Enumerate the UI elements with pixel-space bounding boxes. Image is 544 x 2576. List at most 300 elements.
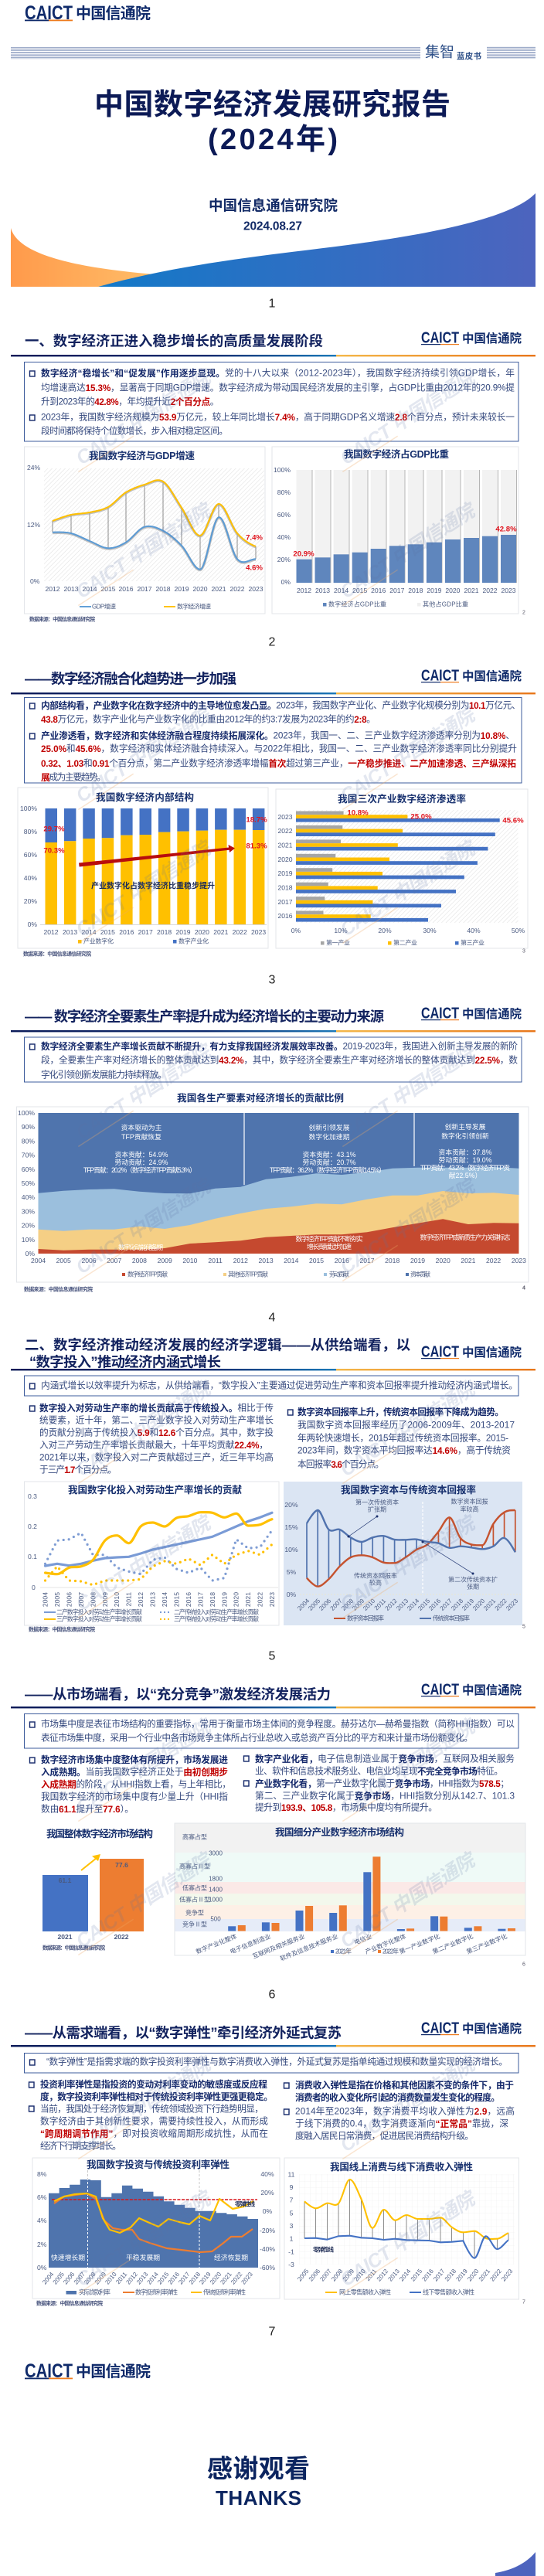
logo: CAICT cover	[25, 2, 151, 24]
panel: factor contribution stacked area chart: 2018	[385, 1257, 400, 1264]
panel: sub-industry market structure: 3000	[209, 1850, 223, 1856]
panel: investment rate elasticity chart: 2015	[156, 2271, 171, 2286]
callout box: market concentration: 表征市场集中度，采用一个行业中各市场竞争主体所占行业总收入或总资产百分比的平方和来计量市场份额变化。	[41, 1733, 473, 1744]
logo: CAICT	[421, 1005, 459, 1022]
panel: investment rate elasticity chart: 2005	[52, 2271, 66, 2286]
panel: investment rate elasticity chart: 2008	[83, 2271, 97, 2286]
slide number small: 5	[522, 1625, 525, 1629]
slide number small: 3	[522, 949, 525, 954]
chart title: 我国各生产要素对经济增长的贡献比例	[177, 1092, 344, 1104]
panel: investment rate elasticity chart: 40%	[260, 2170, 274, 2178]
panel: sub-industry market structure: 第一产业数字化	[398, 1932, 441, 1955]
panel: investment rate elasticity chart: 2022	[230, 2271, 244, 2286]
text block: investment elasticity: 当前，我国处于经济恢复期，传统领域投资下行趋势明显，	[40, 2104, 264, 2115]
panel: factor contribution stacked area chart: 创新引领发展	[309, 1123, 350, 1131]
chart: overall market structure: 2022	[114, 1933, 129, 1941]
callout box: market concentration	[25, 1714, 518, 1748]
text: CAICT 中国信通院	[336, 1714, 481, 1819]
panel: share of GDP bar chart: 2021	[464, 587, 479, 594]
panel: income elasticity chart: 2023	[500, 2268, 515, 2283]
text: CAICT 中国信通院	[336, 365, 481, 469]
text: CAICT 中国信通院	[72, 1376, 217, 1481]
callout box: TFP: 数字经济全要素生产率增长贡献不断提升，有力支撑我国经济发展效率改善。2019-2023年，我国进入创新主导发展的新阶	[41, 1040, 518, 1051]
panel: factor contribution stacked area chart: TFP贡献：20.2%（数字经济TFP贡献5.3%）	[83, 1165, 196, 1174]
text block: investment elasticity: 度，数字投资利率弹性相对于传统投资利率弹性更强更稳定。	[40, 2091, 273, 2102]
panel: investment rate elasticity chart: 2016	[167, 2271, 181, 2286]
slide number small: 4	[522, 1286, 525, 1291]
text block: capital returns	[287, 1407, 515, 1470]
panel: share of GDP bar chart: 100%	[274, 466, 291, 474]
panel: penetration rate horizontal bars: 2018	[277, 884, 293, 892]
callout box: integration trend: 43.8万亿元，数字产业化与产业数字化的比重由2012年的约3:7发展为2023年的约2:8。	[41, 714, 376, 725]
panel: factor contribution stacked area chart: TFP贡献：36.2%（数字经济TFP贡献14.5%）	[270, 1165, 386, 1174]
panel: internal structure stacked bars	[18, 788, 268, 948]
panel: capital return chart: 20%	[284, 1501, 298, 1509]
callout box: digital elasticity	[25, 2053, 518, 2073]
section 5 heading: “数字投入”推动经济内涵式增长	[29, 1354, 221, 1370]
data source: 数据来源：中国信息通信研究院	[24, 1286, 93, 1292]
panel: factor contribution stacked area chart: 2016	[335, 1257, 349, 1264]
text block: investment elasticity: 数字经济由于其创新性要求，需要持续性投入，从而形成	[40, 2116, 268, 2127]
stripe band with blue book mark: 蓝皮书	[457, 51, 482, 61]
title: (2024年)	[208, 124, 338, 156]
panel: capital return chart: 2010	[362, 1597, 377, 1612]
panel: factor contribution stacked area chart: 资本贡献	[410, 1271, 430, 1278]
panel: investment rate elasticity chart: 20%	[260, 2189, 274, 2197]
text block: income elasticity: 消费收入弹性是指在价格和其他因素不变的条件下，由于	[295, 2079, 514, 2090]
logo	[421, 329, 522, 346]
panel: GDP growth line chart: 2021	[211, 585, 226, 593]
panel: penetration rate horizontal bars: 我国三次产业数字经济渗透率	[338, 793, 466, 805]
text block: market maturity	[29, 1754, 231, 1815]
text: CAICT 中国信通院	[72, 836, 217, 941]
panel: income elasticity chart: 我国线上消费与线下消费收入弹性	[330, 2161, 473, 2173]
publisher and date: 中国信息通信研究院	[209, 198, 338, 213]
header rule	[11, 1369, 536, 1370]
panel: internal structure stacked bars: 产业数字化占数字经济比重稳步提升	[91, 881, 215, 890]
panel: GDP growth line chart: 2020	[192, 585, 208, 593]
panel: digital input contribution to labor productivity: 二产数字投入对劳动生产率增长贡献	[56, 1608, 142, 1615]
text block: investment elasticity: 经济下行期支撑增长。	[40, 2141, 121, 2152]
panel: GDP growth line chart: 24%	[27, 464, 41, 471]
panel: share of GDP bar chart: 0%	[281, 578, 291, 586]
panel: GDP growth line chart: 2023	[248, 585, 264, 593]
panel: capital return chart: 第一次传统资本	[355, 1498, 399, 1506]
text: CAICT 中国信通院	[72, 2186, 217, 2291]
text block: income elasticity: 消费者的收入变化所引起的消费数量发生变化的程度。	[295, 2091, 500, 2102]
panel: share of GDP bar chart: 2016	[371, 587, 386, 594]
panel: capital return chart: 传统资本回报率	[354, 1572, 397, 1580]
callout box: digital economy role: 均增速高达15.3%，显著高于同期GDP增速。数字经济成为带动国民经济发展的主引擎，占GDP比重由2012年的20.9%提	[41, 382, 515, 393]
panel: investment rate elasticity chart: 2%	[37, 2241, 47, 2248]
panel: penetration rate horizontal bars: 2022	[277, 827, 293, 835]
panel: GDP growth line chart: 12%	[27, 521, 41, 529]
stripe band with blue book mark: 集智	[425, 43, 454, 60]
panel: capital return chart: 0%	[287, 1591, 297, 1598]
panel: share of GDP bar chart: 2017	[389, 587, 405, 594]
panel: digital input contribution to labor productivity: 三产数字投入对劳动生产率增长贡献	[56, 1615, 142, 1623]
panel: penetration rate horizontal bars: 0%	[291, 927, 301, 934]
panel: factor contribution stacked area chart: 资本贡献：54.9%	[115, 1150, 168, 1159]
panel: income elasticity chart: 5	[290, 2209, 294, 2217]
panel: sub-industry market structure: 低寡占Ⅱ型	[179, 1895, 210, 1903]
text block: market maturity: 入成熟期的阶段，从HHI指数上看，与上年相比，	[41, 1779, 231, 1790]
data source: 数据来源：中国信息通信研究院	[23, 951, 91, 957]
callout box: TFP: 字化引领创新发展能力持续释放。	[41, 1070, 167, 1080]
panel: income elasticity chart: 7	[290, 2197, 294, 2204]
panel: factor contribution stacked area chart: 100%	[18, 1109, 35, 1117]
panel: GDP growth line chart: 2015	[100, 585, 116, 593]
panel: factor contribution stacked area chart: 50%	[22, 1179, 35, 1187]
logo	[421, 1343, 522, 1360]
logo: 中国信通院	[462, 669, 522, 683]
header rule	[11, 1030, 536, 1032]
panel: sub-industry market structure: 产业数字化整体	[364, 1932, 407, 1955]
panel: factor contribution stacked area chart: 70%	[22, 1152, 35, 1159]
panel: GDP growth line chart: 2012	[45, 585, 60, 593]
data source: 数据来源：中国信息通信研究院	[42, 1945, 105, 1951]
panel: factor contribution stacked area chart: 数字化加速期	[309, 1132, 350, 1141]
text block: labor productivity	[29, 1402, 274, 1475]
panel: investment rate elasticity chart: 8%	[37, 2170, 47, 2178]
panel: internal structure stacked bars: 40%	[24, 874, 37, 882]
panel: capital return chart: 2009	[351, 1597, 366, 1612]
panel: digital input contribution to labor productivity: 二产传统投入对劳动生产率增长贡献	[174, 1608, 259, 1615]
panel: sub-industry market structure: 软件及信息技术服务业	[279, 1932, 339, 1962]
panel: factor contribution stacked area chart: 90%	[22, 1123, 35, 1131]
panel: investment rate elasticity chart: 2012	[125, 2271, 139, 2286]
logo: 中国信通院	[462, 1006, 522, 1021]
panel: sub-industry market structure: 竞争Ⅱ型	[182, 1920, 207, 1928]
text block: income elasticity: 2014年至2023年，数字消费平均收入弹性为2.9，远高	[295, 2105, 515, 2116]
cover wave: blue	[98, 193, 536, 287]
text: CAICT 中国信通院	[336, 1848, 481, 1952]
page number 5: 5	[269, 1649, 276, 1663]
panel: factor contribution stacked area chart: 0%	[26, 1250, 35, 1257]
callout box: digital economy role: 升到2023年的42.8%，年均提升近2个百分点。	[41, 396, 219, 407]
panel: capital return chart: 2016	[427, 1597, 443, 1612]
panel: sub-industry market structure	[175, 1823, 525, 1962]
data source: 数据来源：中国信息通信研究院	[36, 2300, 103, 2306]
panel: capital return chart: 第二次传统资本扩	[448, 1575, 498, 1583]
publisher and date	[209, 198, 338, 233]
panel: internal structure stacked bars: 2022	[233, 928, 247, 936]
panel: GDP growth line chart: 0%	[30, 577, 40, 585]
text block: market maturity: 入成熟期。当前我国数字经济正处于由初创期步	[41, 1767, 228, 1778]
arrow: digitization share rising	[79, 845, 235, 867]
panel: share of GDP bar chart: 80%	[277, 488, 291, 496]
panel: investment rate elasticity chart: 数字投资利率弹性	[135, 2288, 178, 2295]
panel: GDP growth line chart: 2013	[63, 585, 79, 593]
callout box: TFP	[25, 1037, 522, 1082]
callout box: integration trend: 展成为主要趋势。	[41, 773, 106, 782]
panel: income elasticity chart: 2012	[376, 2268, 390, 2283]
panel: digital input contribution to labor productivity: 2007	[77, 1592, 85, 1607]
panel: penetration rate horizontal bars: 第二产业	[393, 938, 417, 946]
panel: digital input contribution to labor productivity: 0.3	[28, 1492, 37, 1500]
panel: factor contribution stacked area chart: 30%	[22, 1207, 35, 1215]
page number 1: 1	[269, 297, 276, 311]
panel: investment rate elasticity chart: 2021	[219, 2271, 233, 2286]
panel: share of GDP bar chart: 2014	[334, 587, 348, 594]
panel: factor contribution stacked area chart: 献22.5%）	[449, 1171, 481, 1179]
cover wave: orange	[11, 228, 155, 287]
panel: penetration rate horizontal bars	[276, 789, 528, 948]
panel: internal structure stacked bars: 18.7%	[246, 816, 267, 824]
panel: factor contribution stacked area chart: 2014	[284, 1257, 299, 1264]
logo: CAICT	[421, 1343, 459, 1360]
panel: capital return chart: 2019	[461, 1597, 476, 1612]
panel: income elasticity chart: 1	[290, 2235, 294, 2243]
panel: internal structure stacked bars: 数字产业化	[178, 937, 209, 944]
callout box: integration trend	[25, 697, 522, 783]
text: CAICT 中国信通院	[336, 1376, 481, 1481]
page number 6: 6	[269, 1988, 276, 2002]
panel: internal structure stacked bars: 0%	[28, 920, 37, 928]
section 5 heading: 二、数字经济推动经济发展的经济学逻辑——从供给端看，以	[25, 1337, 411, 1353]
panel: factor contribution stacked area chart: 劳动贡献：19.0%	[439, 1155, 492, 1164]
panel: factor contribution stacked area chart: 资本驱动为主	[121, 1123, 162, 1131]
panel: penetration rate horizontal bars: 2019	[277, 869, 293, 877]
corner wave	[495, 2552, 536, 2576]
page number 7: 7	[269, 2325, 276, 2339]
panel: income elasticity chart: 2008	[330, 2268, 345, 2283]
panel: digital input contribution to labor productivity: 2020	[233, 1592, 240, 1607]
panel: factor contribution stacked area chart: TFP贡献恢复	[121, 1132, 162, 1141]
panel: digital input contribution to labor productivity: 2014	[161, 1592, 168, 1607]
panel: factor contribution stacked area chart: 2017	[359, 1257, 375, 1264]
panel: sub-industry market structure: 电信业	[353, 1932, 373, 1946]
text block: industry market structure: 产业数字化看，第一产业数字化属于竞争市场，HHI指数为578.5；	[255, 1778, 509, 1788]
panel: share of GDP bar chart: 2019	[427, 587, 442, 594]
header rule	[11, 692, 536, 694]
panel: internal structure stacked bars: 100%	[20, 805, 37, 812]
panel: factor contribution stacked area chart: 2007	[107, 1257, 121, 1264]
panel: share of GDP bar chart: 2015	[352, 587, 367, 594]
panel: factor contribution stacked area chart: 2010	[182, 1257, 198, 1264]
panel: digital input contribution to labor productivity: 2008	[89, 1592, 97, 1607]
panel: sub-industry market structure: 2022年	[382, 1948, 399, 1955]
panel: factor contribution stacked area chart: 资本贡献：37.8%	[439, 1148, 492, 1156]
panel: sub-industry market structure: 1800	[209, 1875, 223, 1883]
panel: capital return chart: 扩张期	[368, 1506, 386, 1513]
chart: overall market structure: 77.6	[115, 1861, 128, 1869]
logo: CAICT cover: 中国信通院	[76, 4, 151, 22]
text block: investment elasticity: 投资利率弹性是指投资的变动对利率变动的敏感度或反应程	[40, 2079, 267, 2090]
panel: investment rate elasticity chart: -60%	[260, 2264, 275, 2271]
panel: internal structure stacked bars: 80%	[24, 828, 37, 835]
panel: investment rate elasticity chart: 2019	[198, 2271, 212, 2286]
panel: capital return chart: 数字资本回报	[451, 1498, 488, 1506]
panel: digital input contribution to labor productivity: 0.2	[28, 1523, 37, 1530]
callout box: market concentration: 市场集中度是表征市场结构的重要指标，常用于衡量市场主体间的竞争程度。赫芬达尔—赫希曼指数（简称HHI指数）可以	[41, 1719, 515, 1730]
panel: factor contribution stacked area chart: 数字经济TFP贡献不断夯实	[295, 1234, 363, 1243]
panel: investment rate elasticity chart: 我国数字投资与传统投资利率弹性	[87, 2159, 230, 2170]
panel: penetration rate horizontal bars: 2021	[277, 841, 293, 849]
slide number small: 6	[522, 1962, 525, 1968]
header rule	[11, 2045, 536, 2047]
panel: internal structure stacked bars: 2017	[138, 928, 153, 936]
panel: internal structure stacked bars: 29.7%	[43, 825, 65, 833]
panel: investment rate elasticity chart: 0%	[263, 2207, 273, 2215]
text: CAICT 中国信通院	[336, 836, 481, 941]
panel: factor contribution stacked area chart: 数字经济TFP贡献	[128, 1271, 168, 1278]
logo: 中国信通院	[462, 1683, 522, 1697]
text block: industry market structure: 提升到193.9、105.8，市场集中度均有所提升。	[255, 1802, 437, 1813]
panel: capital return chart: 2011	[373, 1597, 388, 1611]
panel: capital return chart: 2006	[318, 1597, 333, 1612]
panel: penetration rate horizontal bars: 40%	[467, 927, 481, 934]
header rule	[11, 1707, 536, 1708]
text block: labor productivity: 2021年以来，数字投入对二产贡献超过三产，近三年平均高	[39, 1451, 274, 1462]
panel: investment rate elasticity chart: 平稳发展期	[126, 2253, 160, 2261]
panel: share of GDP bar chart: 20%	[277, 556, 291, 563]
callout box: digital economy role: 数字经济“稳增长”和“促发展”作用逐步显现。党的十八大以来（2012-2023年），我国数字经济持续引领GDP增长，年	[41, 368, 515, 379]
section 5 heading	[25, 1337, 411, 1370]
chart: overall market structure	[42, 1828, 153, 1941]
panel: factor contribution stacked area chart: 40%	[22, 1193, 35, 1201]
slide number small: 7	[522, 2300, 525, 2305]
logo	[421, 1682, 522, 1699]
panel: income elasticity chart: 2011	[364, 2268, 379, 2282]
panel: internal structure stacked bars: 20%	[24, 897, 37, 905]
panel: investment rate elasticity chart: 2011	[114, 2271, 129, 2285]
panel: share of GDP bar chart: 60%	[277, 511, 291, 519]
panel: investment rate elasticity chart: 2007	[73, 2271, 87, 2286]
panel: factor contribution stacked area chart: 劳动贡献	[329, 1271, 349, 1278]
panel: digital input contribution to labor productivity: 2012	[137, 1592, 144, 1607]
panel: GDP growth line chart: 2014	[82, 585, 97, 593]
panel: penetration rate horizontal bars: 30%	[423, 927, 437, 934]
panel: digital input contribution to labor productivity: 2019	[220, 1592, 228, 1607]
callout box: intensive growth	[25, 1376, 518, 1396]
callout box: digital elasticity: “数字弹性”是指需求端的数字投资利率弹性与数字消费收入弹性，外延式复苏是指单纯通过规模和数量实现的经济增长。	[46, 2056, 508, 2067]
text block: labor productivity: 入对三产劳动生产率增长贡献最大，十年平均贡献22.4%，	[39, 1439, 268, 1450]
logo: CAICT closing: 中国信通院	[76, 2362, 151, 2380]
panel: internal structure stacked bars: 产业数字化	[83, 937, 114, 944]
logo: 中国信通院	[462, 331, 522, 345]
panel: capital return chart: 5%	[287, 1568, 297, 1576]
text: CAICT 中国信通院	[72, 1174, 217, 1278]
text block: income elasticity	[284, 2079, 515, 2141]
text block: market maturity: 数由61.1提升至77.6）。	[41, 1804, 134, 1815]
panel: sub-industry market structure: 高寡占型	[182, 1833, 207, 1841]
panel: investment rate elasticity chart: 快速增长期	[51, 2253, 85, 2261]
panel: capital return chart: 2007	[329, 1597, 344, 1612]
panel: penetration rate horizontal bars: 10.8%	[347, 808, 369, 818]
data source: 数据来源：中国信息通信研究院	[29, 615, 95, 623]
chart: overall market structure: 我国整体数字经济市场结构	[46, 1828, 153, 1839]
panel: GDP growth line chart: 2022	[230, 585, 245, 593]
logo: CAICT closing: CAICT	[25, 2360, 73, 2382]
panel: share of GDP bar chart: 2020	[445, 587, 461, 594]
panel: investment rate elasticity chart: 0%	[37, 2264, 47, 2271]
panel: factor contribution stacked area chart: 2020	[436, 1257, 450, 1264]
panel: investment rate elasticity chart: 传统投资利率弹性	[203, 2288, 246, 2295]
panel: internal structure stacked bars: 70.3%	[43, 847, 65, 855]
panel: investment rate elasticity chart: 2006	[62, 2271, 76, 2286]
panel: income elasticity chart: 2015	[410, 2268, 424, 2283]
text block: industry market structure	[244, 1753, 515, 1813]
panel: GDP growth line chart: 2018	[155, 585, 171, 593]
panel: share of GDP bar chart	[272, 447, 518, 614]
panel: investment rate elasticity chart: 2009	[94, 2271, 108, 2286]
panel: internal structure stacked bars: 60%	[24, 851, 37, 859]
callout box: integration trend: 25.0%和45.6%，数字经济和实体经济融合持续深入。与2022年相比，我国一、二、三产业数字经济渗透率同比分别提升	[41, 744, 517, 754]
logo: CAICT	[421, 1682, 459, 1699]
panel: income elasticity chart: 2009	[342, 2268, 356, 2283]
panel: investment rate elasticity chart: 2004	[41, 2271, 56, 2286]
panel: factor contribution stacked area chart: 2011	[208, 1257, 223, 1264]
callout box: integration trend: 内部结构看，产业数字化在数字经济中的主导地位愈发凸显。2023年，我国数字产业化、产业数字化规模分别为10.1万亿元、	[41, 700, 521, 711]
panel: income elasticity chart: 2020	[466, 2268, 481, 2283]
callout box: digital economy role: 2023年，我国数字经济规模为53.9万亿元，较上年同比增长7.4%，高于同期GDP名义增速2.8个百分点，预计未来较长一	[41, 411, 515, 422]
panel: digital input contribution to labor productivity	[25, 1482, 279, 1625]
chart: overall market structure: 2021	[57, 1933, 73, 1941]
panel: capital return chart: 我国数字资本与传统资本回报率	[341, 1484, 476, 1496]
panel: penetration rate horizontal bars: 2020	[277, 856, 293, 863]
panel: factor contribution stacked area chart: 数字化引领创新	[441, 1131, 489, 1140]
text: CAICT 中国信通院	[336, 1174, 481, 1278]
panel: penetration rate horizontal bars: 20%	[378, 927, 392, 934]
panel: digital input contribution to labor productivity: 2021	[244, 1592, 252, 1607]
chart: overall market structure: 61.1	[59, 1877, 72, 1884]
closing thanks: 感谢观看	[207, 2455, 310, 2482]
logo: CAICT	[421, 2020, 459, 2037]
panel: capital return chart: 2004	[296, 1597, 311, 1612]
panel: penetration rate horizontal bars: 第一产业	[326, 938, 350, 946]
panel: factor contribution stacked area chart	[17, 1107, 529, 1282]
panel: internal structure stacked bars: 2019	[175, 928, 191, 936]
panel: investment rate elasticity chart: 2020	[209, 2271, 223, 2286]
panel: penetration rate horizontal bars: 10%	[334, 927, 348, 934]
panel: digital input contribution to labor productivity: 2015	[173, 1592, 181, 1607]
panel: capital return chart: 张期	[467, 1583, 479, 1591]
text block: capital returns: 数字资本回报率上升，传统资本回报率下降成为趋势。	[298, 1407, 504, 1417]
panel: income elasticity chart: 3	[290, 2222, 294, 2230]
panel: internal structure stacked bars: 2014	[81, 928, 97, 936]
panel: GDP growth line chart: 2019	[174, 585, 189, 593]
panel: factor contribution stacked area chart: 2008	[132, 1257, 147, 1264]
panel: digital input contribution to labor productivity: 2011	[125, 1592, 133, 1606]
logo: CAICT	[421, 329, 459, 346]
panel: investment rate elasticity chart: 零弹性线	[235, 2200, 255, 2207]
text block: labor productivity: 的贡献分别高于传统投入5.9和12.6个百分点。其中，数字投	[39, 1427, 274, 1438]
panel: share of GDP bar chart: 我国数字经济占GDP比重	[344, 448, 449, 460]
text: CAICT 中国信通院	[72, 365, 217, 469]
panel: sub-industry market structure: 500	[210, 1915, 221, 1923]
text block: industry market structure: 业、软件和信息技术服务业、电信业均呈现不完全竞争市场特征。	[255, 1765, 503, 1776]
panel: investment rate elasticity chart: 2018	[188, 2271, 202, 2286]
panel: digital input contribution to labor productivity: 0.1	[28, 1553, 37, 1560]
panel: sub-industry market structure: 1000	[209, 1897, 223, 1903]
panel: GDP growth line chart: 7.4%	[246, 533, 263, 543]
logo: 中国信通院	[462, 2021, 522, 2036]
panel: investment rate elasticity chart: 2023	[240, 2271, 254, 2286]
panel: income elasticity chart: 2007	[318, 2268, 333, 2283]
text block: capital returns: 年两轮快速增长，2015年超过传统资本回报率。2015-	[298, 1433, 508, 1444]
callout box: integration trend: 0.32、1.03和0.91个百分点，第二产业数字经济渗透率增幅首次超过第三产业，一产稳步推进、二产加速渗透、三产纵深拓	[41, 757, 516, 768]
panel: internal structure stacked bars: 2012	[43, 928, 59, 936]
panel: GDP growth line chart: 2017	[137, 585, 152, 593]
header rule	[11, 355, 536, 356]
text block: market maturity: 数字经济市场集中度整体有所提升，市场发展进	[41, 1754, 228, 1765]
panel: factor contribution stacked area chart: 资本贡献：43.1%	[303, 1150, 356, 1159]
text: CAICT 中国信通院	[72, 703, 217, 807]
panel: capital return chart: 2015	[416, 1597, 432, 1612]
panel: share of GDP bar chart: 20.9%	[293, 550, 314, 558]
stripe band with blue book mark	[11, 43, 536, 61]
